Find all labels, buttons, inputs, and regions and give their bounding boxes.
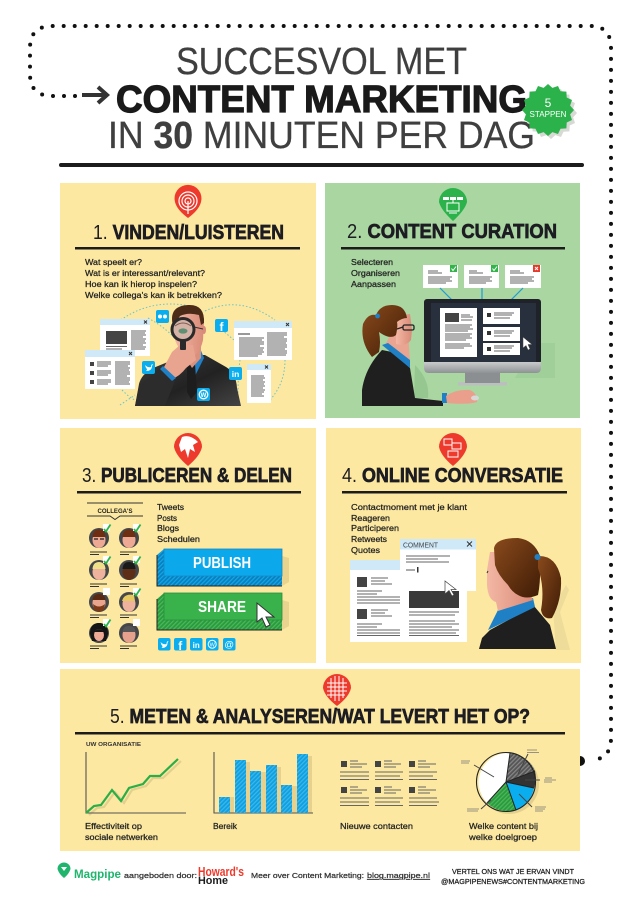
heading: 4. ONLINE CONVERSATIE [342,465,563,487]
line chart [86,752,186,815]
cursor [523,337,532,350]
icon: radar pin [174,185,201,218]
icon: analytics pin [323,674,351,706]
window: article [234,321,292,360]
card: approved 1 [423,265,458,288]
text block: conversation [351,502,468,555]
avatar 8 [119,619,140,648]
text block: channels: Posts [157,513,177,523]
icon: facebook: f [220,320,224,334]
logo: howard's home: Howard's [198,865,244,879]
title: SUCCESVOL MET [176,41,467,83]
text block: conversation: Retweets [351,534,387,544]
card: rejected [505,265,541,288]
text block: questions: Hoe kan ik hierop inspelen? [85,279,197,289]
caption [85,821,158,842]
text block: actions [351,257,400,289]
footer [58,862,585,887]
connector lines [440,288,523,306]
text block: conversation: Contactmoment met je klant [351,502,468,512]
caption: Effectiviteit op [85,821,142,831]
comment window [400,539,476,596]
text: meer over: Meer over Content Marketing: [251,871,364,880]
avatar 4 [119,556,140,586]
illustration: woman from the side [479,538,570,650]
icon: wordpress: W [201,393,207,399]
share icons: @ [224,640,234,650]
window: image and text [100,319,150,356]
cursor [445,581,456,596]
title: IN 30 MINUTEN PER DAG [108,115,535,157]
avatar 6 [119,588,140,618]
pie chart [461,750,556,814]
comment window: COMMENT [403,542,439,550]
text: call to action: @MAGPIPENEWS#CONTENTMARKETING [441,877,585,886]
icon: twitter [142,361,155,374]
colleague avatars [89,524,140,648]
badge: 5 stappen: 5 [545,96,552,110]
avatar 2 [119,524,140,554]
text: meer over: blog.magpipe.nl [367,871,430,880]
icon: screens pin [439,433,467,466]
icon: linkedin [229,367,242,380]
caption: Welke content bij [469,821,538,831]
label: uw organisatie: UW ORGANISATIE [86,742,141,748]
window: small article [247,364,271,403]
logo: howard's home [198,865,244,887]
caption: Nieuwe contacten [340,821,413,831]
text block: questions [85,257,222,300]
icon: facebook [215,319,228,334]
collega's label: COLLEGA'S [98,508,132,515]
title rule [59,163,584,167]
button: publish: PUBLISH [193,555,251,572]
illustration: monitor [424,299,555,386]
avatar 5 [89,588,110,618]
heading: 2. CONTENT CURATION [347,221,557,243]
text block: channels [157,502,200,544]
panel: 4 online conversatie [326,428,581,663]
contacts list [340,761,439,806]
avatar 7 [89,619,110,648]
heading: 5. METEN & ANALYSEREN/WAT LEVERT HET OP? [110,706,530,728]
heading: 1. VINDEN/LUISTEREN [93,222,284,244]
text block: channels: Schedulen [157,534,200,544]
text block: questions: Wat speelt er? [85,257,142,267]
logo: magpipe [58,862,121,881]
icon: flickr [156,310,169,323]
panel: 3 publiceren & delen [60,428,316,663]
text block: questions: Wat is er interessant/relevant? [85,268,205,278]
dotted connector line [30,26,611,766]
button: share: SHARE [198,599,246,616]
caption [468,821,538,842]
text block: actions: Organiseren [351,268,400,278]
panel: 1 vinden/luisteren [60,183,316,419]
share icons: f [178,639,183,653]
text block: conversation: Quotes [351,545,380,555]
caption: Bereik [213,821,238,831]
text block: actions: Selecteren [351,257,393,267]
illustration: businessman with magnifier [135,305,241,406]
heading: 3. PUBLICEREN & DELEN [82,465,292,487]
share icons [158,638,236,653]
button: share [157,593,289,630]
text: call to action [441,867,585,886]
dotted network circles [118,304,285,405]
text block: actions: Aanpassen [351,279,396,289]
icon: monitor pin [439,188,467,221]
text block: conversation: Reageren [351,513,390,523]
logo: magpipe: Magpipe [74,869,121,881]
panel: 5 meten & analyseren [60,669,580,851]
text block: conversation: Participeren [351,523,399,533]
logo: howard's home: Home [198,875,228,887]
icon: wordpress [197,388,210,401]
icon: globe pin [174,433,202,466]
text block: questions: Welke collega's kan ik betrekken? [85,290,222,300]
panel: 2 content curation [325,183,580,418]
window: list [85,350,135,389]
caption: sociale netwerken [85,832,158,842]
badge: 5 stappen: STAPPEN [530,110,567,119]
text: meer over [251,871,430,880]
illustration: woman at desk [362,305,479,406]
text block: channels: Tweets [157,502,184,512]
share icons: W [210,642,216,648]
avatar 3 [89,556,110,586]
button: publish [157,549,289,586]
collega's label [87,503,143,520]
avatar 1 [89,524,110,554]
cursor [257,603,274,627]
icon: linkedin: in [232,369,239,379]
title [108,41,535,157]
arrow into title [82,87,107,103]
text: call to action: VERTEL ONS WAT JE ERVAN VINDT [452,867,575,876]
share icons: in [193,641,200,650]
text: aangeboden door: aangeboden door: [124,871,197,880]
card: approved 2 [464,265,499,288]
web page [350,560,467,642]
bar chart [214,752,313,813]
title: CONTENT MARKETING [116,79,527,121]
caption: welke doelgroep [468,832,537,842]
text block: channels: Blogs [157,523,179,533]
badge: 5 stappen [522,84,577,139]
